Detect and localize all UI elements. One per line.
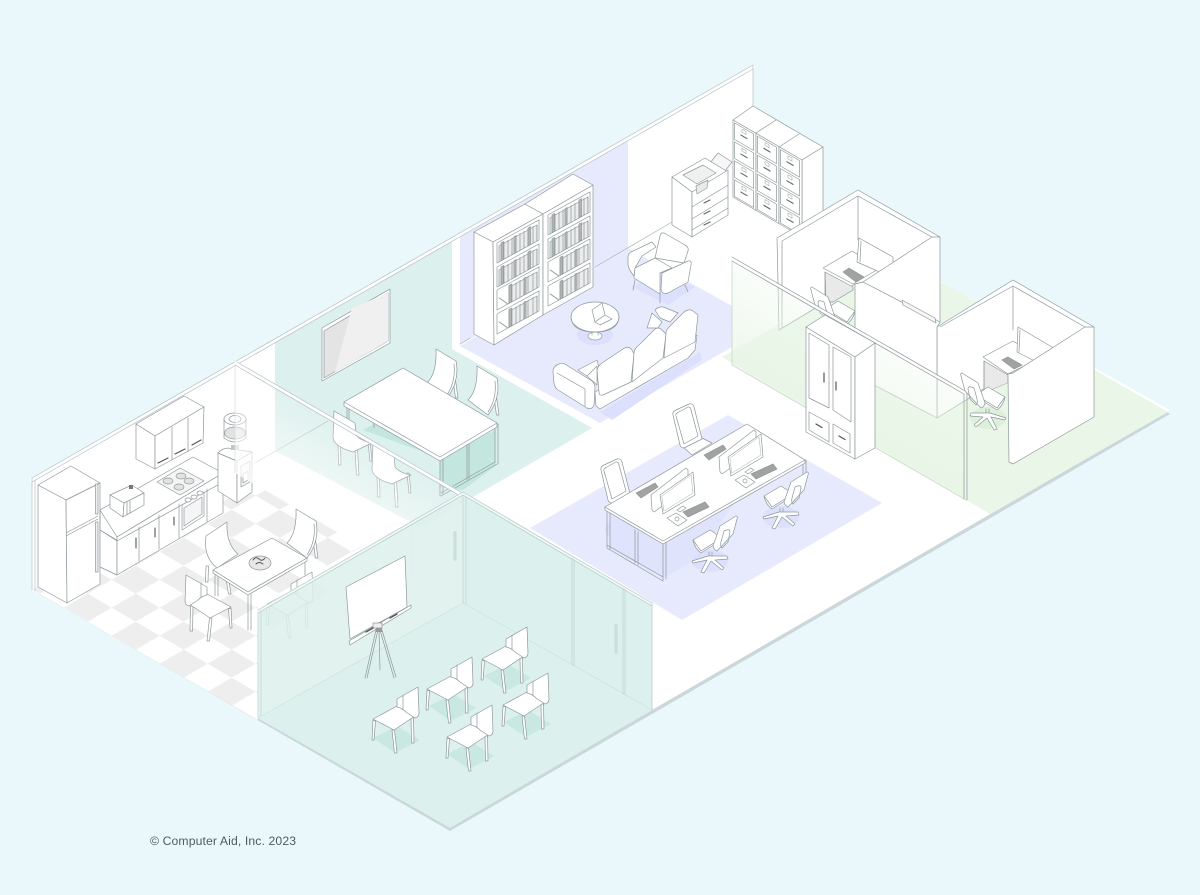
- meeting room chairs: [372, 627, 551, 771]
- conference table: [344, 368, 498, 496]
- building floor slab: [32, 177, 1170, 831]
- conference chairs behind table: [427, 349, 499, 415]
- cooktop: [157, 468, 204, 495]
- microwave: [110, 485, 144, 517]
- lower meeting room walls: [258, 492, 652, 718]
- armchair: [628, 233, 695, 305]
- conference chairs in front of table: [333, 411, 411, 507]
- cubicle two front wall: [1008, 327, 1094, 464]
- filing cabinets: [733, 106, 823, 237]
- kitchen counter and cabinets: [100, 457, 223, 575]
- lounge floor zone: [460, 248, 732, 423]
- water cooler: [218, 413, 252, 503]
- back wall: [32, 65, 753, 590]
- office workstation desk: [601, 404, 806, 581]
- meeting room door: [454, 532, 625, 695]
- cubicle one: [777, 190, 940, 344]
- bookshelf right: [525, 174, 593, 315]
- lounge wall tint: [460, 136, 628, 345]
- green glass partition: [732, 257, 967, 500]
- cubicle two: [937, 280, 1094, 440]
- lower meeting room floor: [258, 603, 652, 828]
- office swivel chairs: [692, 472, 808, 573]
- printer copier: [672, 153, 732, 237]
- panel wall between cubicles: [855, 282, 940, 418]
- wall-mounted TV: [322, 289, 390, 381]
- coffee table with laptop: [571, 302, 619, 345]
- refrigerator: [38, 466, 100, 603]
- glass partition between kitchen and conference room: [235, 362, 464, 605]
- upper kitchen cabinets: [136, 396, 204, 469]
- copyright note: © Computer Aid, Inc. 2023: [150, 834, 296, 848]
- conference room wall tint: [275, 237, 452, 451]
- workstation floor zone: [530, 415, 882, 620]
- conference room floor zone: [275, 349, 592, 528]
- storage armoire: [806, 315, 875, 459]
- furniture and walls line art: [32, 65, 1094, 828]
- kitchen dining set: [185, 509, 330, 641]
- bookshelf left: [474, 204, 543, 345]
- kitchen tile floor: [32, 485, 363, 720]
- cubicle floor zone: [722, 263, 1168, 514]
- back wall outlines: [32, 65, 753, 591]
- flip chart on tripod: [346, 556, 411, 678]
- sofa: [553, 307, 702, 420]
- kitchen chair behind glass: [266, 572, 313, 638]
- cubicle two chair: [961, 373, 1006, 430]
